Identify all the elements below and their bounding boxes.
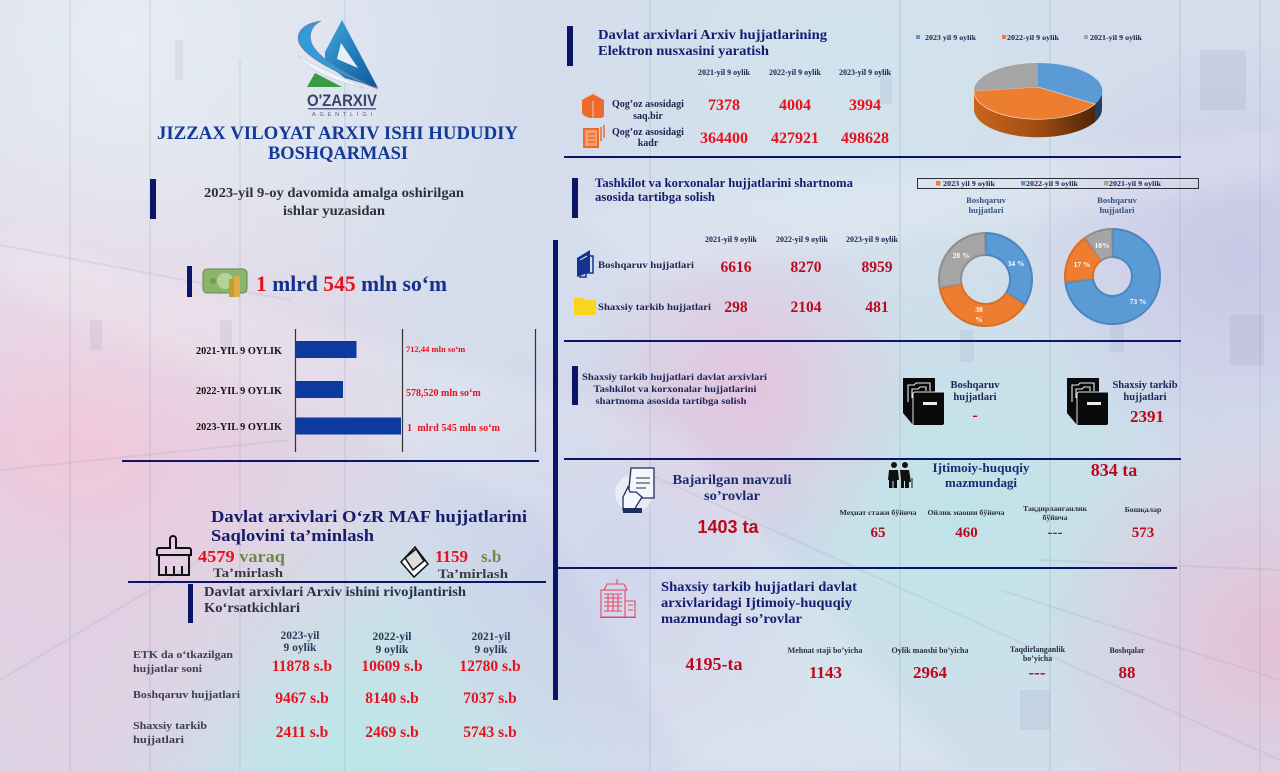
- stat: files restored: 1159: [435, 547, 468, 566]
- heading: mazmundagi so’rovlar: [661, 611, 802, 626]
- stat: management documents: hujjatlari: [953, 392, 997, 403]
- donut 2 caption: hujjatlari: [1100, 205, 1135, 215]
- column labels: [788, 645, 1145, 663]
- chart: donut 2: [1074, 195, 1146, 310]
- year headers: 2022-yil 9 oylik: [776, 235, 829, 244]
- stat: sheets restored: 4579 varaq: [198, 547, 286, 566]
- heading: Elektron nusxasini yaratish: [598, 43, 770, 58]
- chart: donut 1: %: [975, 315, 983, 324]
- values: [870, 525, 1154, 541]
- values: [720, 259, 893, 316]
- row labels: Qog’oz asosidagi: [612, 127, 684, 138]
- title: [157, 124, 519, 164]
- row labels: Boshqaruv hujjatlari: [598, 261, 694, 271]
- heading: asosida tartibga solish: [595, 190, 715, 204]
- values: 8270: [790, 259, 822, 276]
- year headers: 2021-yil 9 oylik: [698, 68, 751, 77]
- stat: sheets restored: Ta’mirlash: [213, 565, 284, 580]
- icon: building: [600, 579, 636, 618]
- heading: [672, 473, 792, 504]
- subtitle accent bar: [150, 179, 156, 219]
- column headers: [281, 630, 510, 656]
- heading: Shaxsiy tarkib hujjatlari davlat: [661, 579, 858, 594]
- heading: [204, 584, 467, 615]
- panel: personnel documents ordering: [572, 366, 1178, 426]
- legend: 2021-yil 9 oylik: [1109, 179, 1162, 188]
- icon: elderly people: [888, 462, 912, 488]
- panel: header: [150, 20, 519, 219]
- values: 10609 s.b: [361, 658, 423, 675]
- values: 427921: [771, 130, 819, 147]
- row labels: Qog’oz asosidagi: [612, 99, 684, 110]
- heading: [595, 176, 854, 204]
- bar 2021: 712,44 mln so‘m: [406, 344, 465, 354]
- column labels: Бошқалар: [1125, 505, 1162, 514]
- legend: [918, 178, 1198, 188]
- values: [272, 658, 521, 741]
- column labels: Тақдирланганлик: [1023, 504, 1088, 513]
- values: 364400: [700, 130, 748, 147]
- heading: arxivlaridagi Ijtimoiy-huquqiy: [661, 595, 852, 610]
- values: 298: [724, 299, 748, 316]
- chart: donut 1: 38: [975, 305, 983, 314]
- values: 4004: [779, 97, 811, 114]
- heading: social-legal: Ijtimoiy-huquqiy: [932, 460, 1030, 475]
- stat: personnel documents: 2391: [1130, 407, 1164, 426]
- heading: Davlat arxivlari O‘zR MAF hujjatlarini: [211, 507, 527, 526]
- values: 7378: [708, 97, 740, 114]
- heading: [598, 27, 827, 58]
- values: 3994: [849, 97, 881, 114]
- stat: files restored: Ta’mirlash: [438, 566, 509, 581]
- heading: [582, 372, 767, 407]
- panel: MAF document preservation: [157, 507, 527, 581]
- row labels: ETK da o‘tkazilgan: [133, 649, 233, 661]
- column headers: 9 oylik: [376, 644, 409, 656]
- row labels: Boshqaruv hujjatlari: [133, 689, 240, 701]
- subtitle: 2023-yil 9-oy davomida amalga oshirilgan: [204, 185, 465, 200]
- column labels: Oylik maoshi bo’yicha: [892, 646, 968, 655]
- logo subtitle: AGENTLIGI: [312, 112, 372, 118]
- column labels: Меҳнат стажи бўйича: [839, 508, 917, 517]
- donut 1 caption: hujjatlari: [969, 205, 1004, 215]
- panel: archive development indicators: [133, 584, 521, 746]
- icon: book: [401, 547, 428, 577]
- chart: donut 1: 28 %: [953, 251, 969, 260]
- column headers: 2022-yil: [373, 631, 411, 643]
- values: [809, 663, 1136, 682]
- column labels: [839, 504, 1162, 522]
- column labels: Mehnat staji bo’yicha: [788, 646, 862, 655]
- column labels: бўйича: [1042, 513, 1068, 522]
- chart: donut 2: 17 %: [1074, 260, 1090, 269]
- bar 2022: [196, 381, 481, 399]
- values: 6616: [720, 259, 752, 276]
- row labels: Shaxsiy tarkib hujjatlari: [598, 303, 711, 313]
- heading: Shaxsiy tarkib hujjatlari davlat arxivlari: [582, 372, 767, 383]
- panel: contract-based document ordering: [572, 176, 1198, 324]
- heading: [211, 507, 527, 545]
- row labels: Shaxsiy tarkib: [133, 720, 207, 732]
- panel: electronic copies: [567, 26, 1143, 149]
- year headers: 2022-yil 9 oylik: [769, 68, 822, 77]
- icon: yellow folder: [574, 298, 596, 315]
- bar 2023: [196, 418, 501, 434]
- values: 460: [955, 525, 978, 541]
- heading: Saqlovini ta’minlash: [211, 526, 375, 545]
- values: 2964: [913, 663, 948, 682]
- bar 2021: 2021-YIL 9 OYLIK: [196, 346, 283, 357]
- values: 9467 s.b: [275, 690, 329, 707]
- values: 481: [865, 299, 889, 316]
- stat: management documents: -: [972, 407, 978, 424]
- values: 11878 s.b: [272, 658, 332, 675]
- heading: Tashkilot va korxonalar hujjatlarini shartnoma: [595, 176, 854, 190]
- values: 8140 s.b: [365, 690, 419, 707]
- legend: 2023 yil 9 oylik: [943, 179, 996, 188]
- total value: 1 mlrd 545 mln so‘m: [256, 271, 447, 296]
- donut 1 caption: Boshqaruv: [966, 195, 1007, 205]
- column headers: 2021-yil: [472, 631, 510, 643]
- legend: 2022-yil 9 oylik: [1026, 179, 1079, 188]
- values: 2469 s.b: [365, 724, 419, 741]
- values: 65: [870, 525, 886, 541]
- values: 88: [1118, 663, 1136, 682]
- stat: management documents: [950, 380, 1000, 424]
- bar 2022: 2022-YIL 9 OYLIK: [196, 386, 283, 397]
- bar chart: funds by year: [196, 329, 536, 452]
- column labels: Boshqalar: [1109, 646, 1145, 655]
- values: 498628: [841, 130, 889, 147]
- column headers: 2023-yil: [281, 630, 319, 642]
- row labels: hujjatlari: [133, 734, 184, 746]
- legend: 2021-yil 9 oylik: [1090, 33, 1143, 42]
- donut 2 caption: [1097, 195, 1138, 215]
- total: 4195: 4195-ta: [686, 654, 742, 674]
- panel: total amount: [187, 266, 447, 297]
- stat: files restored: s.b: [481, 547, 501, 566]
- total: 1403: 1403 ta: [697, 517, 760, 537]
- panel: personnel social-legal requests: [600, 579, 1145, 682]
- row labels: [598, 261, 711, 313]
- row labels: [612, 99, 684, 149]
- row labels: [133, 649, 240, 746]
- chart: donut 1: [950, 195, 1024, 324]
- legend: 2023 yil 9 oylik: [925, 33, 977, 42]
- title: BOSHQARMASI: [268, 144, 408, 164]
- row labels: kadr: [638, 138, 659, 149]
- column labels: bo’yicha: [1023, 654, 1052, 663]
- heading: social-legal: [932, 460, 1030, 490]
- stat: sheets restored: [198, 547, 286, 580]
- values: 5743 s.b: [463, 724, 517, 741]
- heading: Tashkilot va korxonalar hujjatlarini: [594, 384, 757, 395]
- stat: files restored: [435, 547, 509, 581]
- chart: donut 1: 34 %: [1008, 259, 1024, 268]
- year headers: 2023-yil 9 oylik: [839, 68, 892, 77]
- column headers: 9 oylik: [475, 644, 508, 656]
- icon: hand with document: [615, 468, 654, 513]
- icon: blue book: [577, 250, 593, 277]
- values: 573: [1132, 525, 1154, 541]
- year headers: 2021-yil 9 oylik: [705, 235, 758, 244]
- chart: donut 2: 73 %: [1130, 297, 1146, 306]
- main vertical divider: [553, 240, 558, 700]
- values: ---: [1048, 525, 1062, 541]
- column labels: Taqdirlanganlik: [1010, 645, 1066, 654]
- logo wordmark: O'ZARXIV: [307, 91, 378, 110]
- donut 2 caption: Boshqaruv: [1097, 195, 1138, 205]
- icon: O'zarxiv logo: [298, 20, 378, 118]
- icon: brush: [157, 536, 191, 575]
- subtitle: ishlar yuzasidan: [283, 203, 386, 218]
- year headers: [698, 68, 892, 77]
- values: 12780 s.b: [459, 658, 521, 675]
- donut 1 caption: [966, 195, 1007, 215]
- icon: folders 2: [1067, 378, 1108, 425]
- icon: documents: [584, 125, 604, 147]
- values: ---: [1029, 663, 1046, 682]
- bar 2023: 2023-YIL 9 OYLIK: [196, 422, 283, 433]
- year headers: 2023-yil 9 oylik: [846, 235, 899, 244]
- legend: [916, 33, 1143, 42]
- row labels: saq.bir: [633, 111, 663, 122]
- icon: folders 1: [903, 378, 944, 425]
- title: JIZZAX VILOYAT ARXIV ISHI HUDUDIY: [157, 124, 519, 144]
- stat: personnel documents: hujjatlari: [1123, 392, 1167, 403]
- subtitle: [204, 185, 465, 218]
- column headers: 9 oylik: [284, 642, 317, 654]
- icon: money: [203, 269, 247, 297]
- values: 1143: [809, 663, 842, 682]
- icon: books: [582, 92, 604, 118]
- row labels: hujjatlar soni: [133, 663, 202, 675]
- values: [700, 97, 889, 147]
- heading: so’rovlar: [704, 489, 760, 504]
- heading: Davlat arxivlari Arxiv hujjatlarining: [598, 27, 827, 42]
- stat: management documents: Boshqaruv: [950, 380, 1000, 391]
- values: 2411 s.b: [276, 724, 328, 741]
- heading: Ko‘rsatkichlari: [204, 600, 300, 615]
- legend: 2022-yil 9 oylik: [1007, 33, 1060, 42]
- heading: social-legal: mazmundagi: [945, 475, 1017, 490]
- values: 8959: [862, 259, 893, 276]
- values: 7037 s.b: [463, 690, 517, 707]
- heading: shartnoma asosida tartibga solish: [596, 396, 747, 407]
- bar 2022: 578,520 mln so‘m: [406, 388, 481, 399]
- bar 2021: [196, 341, 465, 358]
- values: 2104: [790, 299, 822, 316]
- year headers: [705, 235, 899, 244]
- panel: thematic requests: [615, 460, 1162, 541]
- stat: personnel documents: [1112, 380, 1178, 426]
- total: 834: 834 ta: [1091, 460, 1137, 480]
- bar 2023: 1 mlrd 545 mln so‘m: [407, 423, 501, 434]
- chart: 3D pie: [974, 63, 1102, 137]
- chart: donut 2: 10%: [1094, 241, 1110, 250]
- heading: Bajarilgan mavzuli: [672, 473, 792, 488]
- heading: Davlat arxivlari Arxiv ishini rivojlantirish: [204, 584, 467, 599]
- heading: [661, 579, 858, 626]
- stat: personnel documents: Shaxsiy tarkib: [1112, 380, 1178, 391]
- column labels: Ойлик маоши бўйича: [927, 508, 1005, 517]
